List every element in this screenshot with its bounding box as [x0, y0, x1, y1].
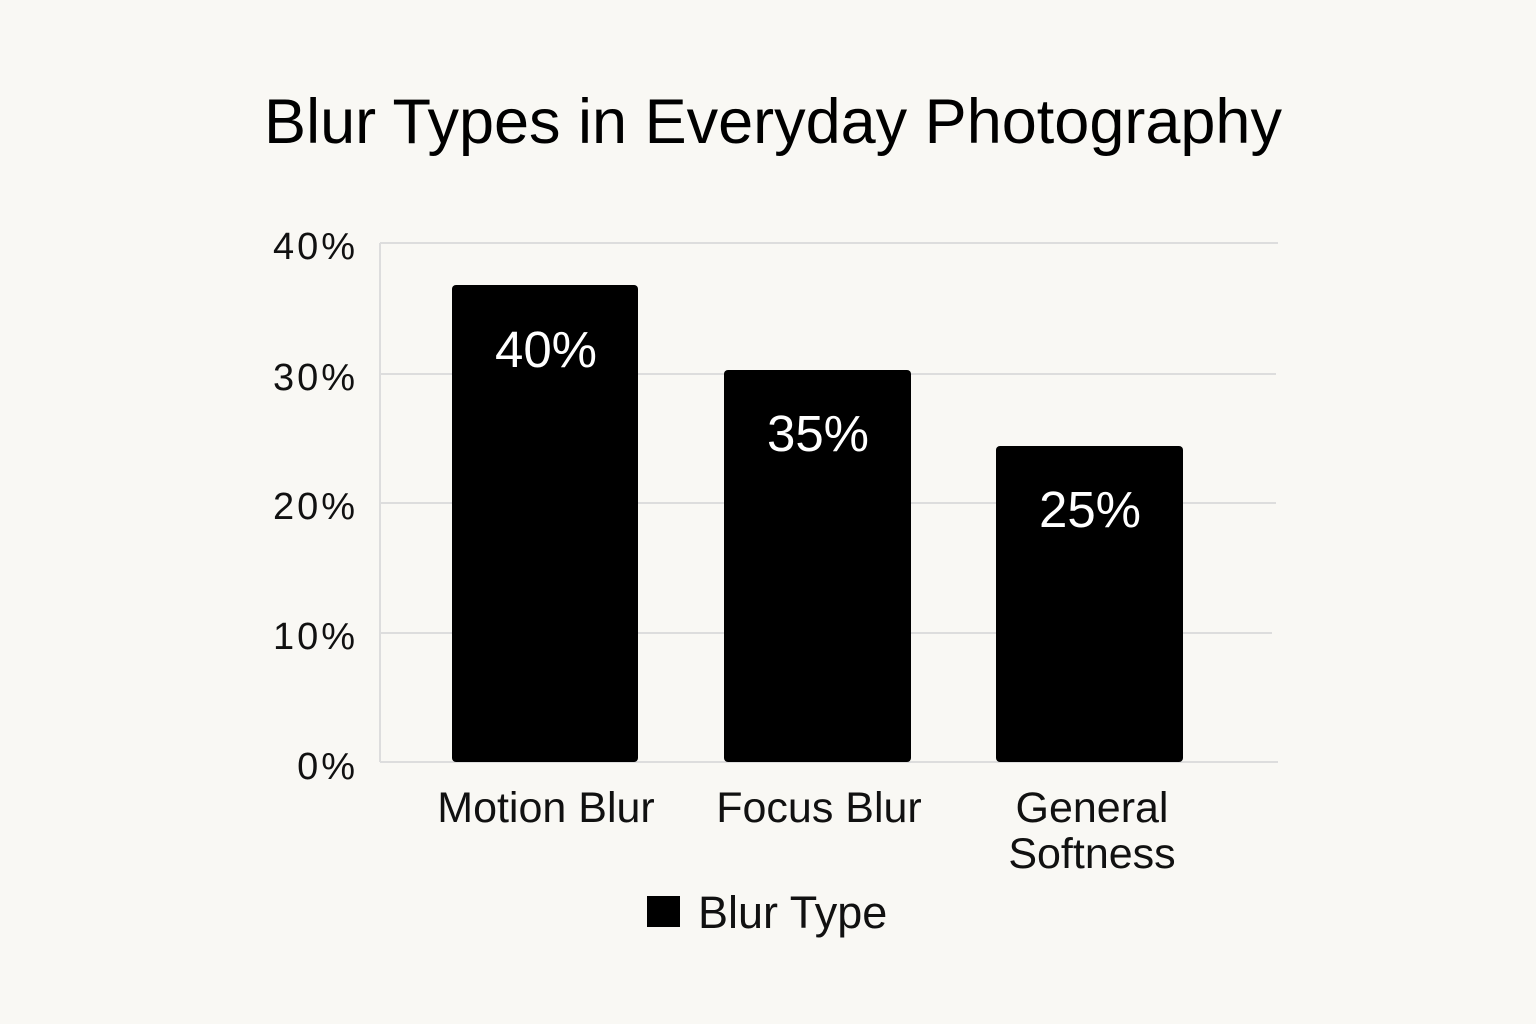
x labels: General [1016, 784, 1168, 832]
title: Blur Types in Everyday Photography [264, 87, 1282, 157]
bar: Focus Blur: 35% [767, 405, 869, 462]
grid lines and y axis: 0% [297, 746, 358, 788]
bar: Focus Blur [724, 370, 911, 762]
grid lines and y axis: 30% [273, 357, 358, 399]
bar: General Softness: 25% [1039, 481, 1141, 538]
bar: Motion Blur: 40% [495, 321, 597, 378]
x labels [437, 784, 1176, 878]
bar: General Softness [996, 446, 1183, 762]
legend: Blur Type [698, 887, 887, 938]
grid lines and y axis: 20% [273, 486, 358, 528]
x labels: Focus Blur [716, 784, 922, 832]
grid lines and y axis: 10% [273, 616, 358, 658]
x labels: Softness [1008, 830, 1176, 878]
grid lines and y axis [273, 226, 1278, 788]
x labels: Motion Blur [437, 784, 655, 832]
grid lines and y axis: 40% [273, 226, 358, 268]
bar: Motion Blur [452, 285, 638, 762]
